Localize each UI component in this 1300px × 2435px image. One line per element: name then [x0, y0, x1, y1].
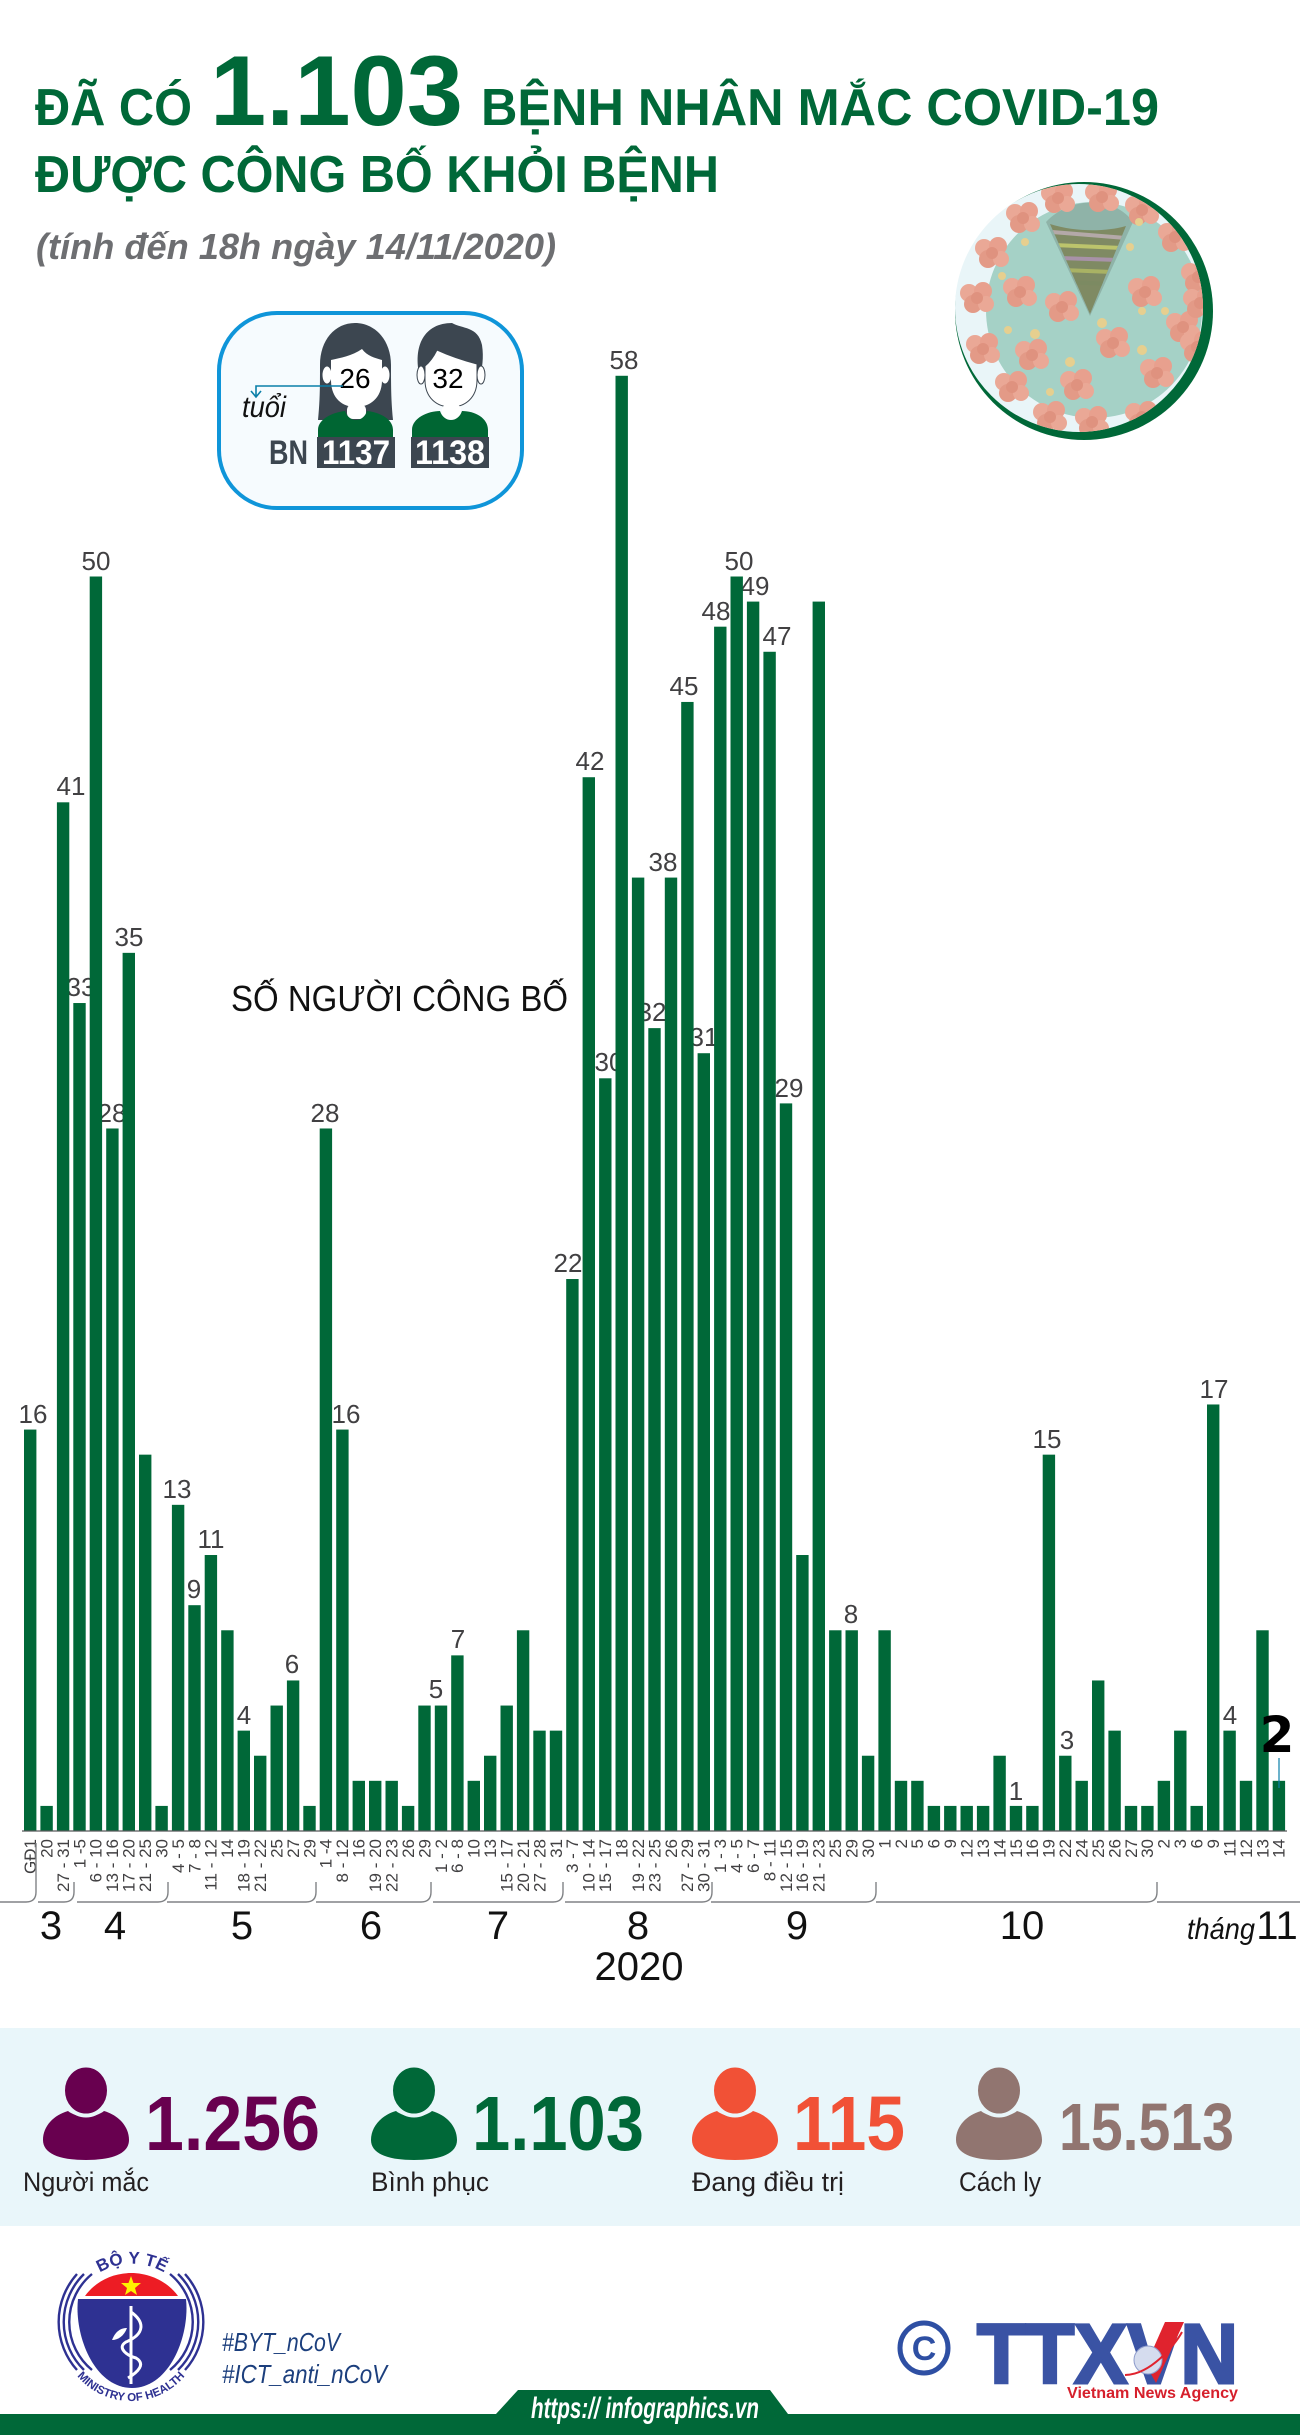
chart: date tick labels: 1 - 3 [711, 1839, 730, 1873]
chart: value labels: 8 [844, 1599, 858, 1629]
chart: date tick labels: 19 - 22 [629, 1839, 648, 1892]
footer: band with URL: https:// infographics.vn [531, 2392, 759, 2425]
chart: date tick labels: 17 - 20 [120, 1839, 139, 1892]
chart: month labels: 5 [231, 1904, 253, 1948]
chart: value labels: 3 [1060, 1725, 1074, 1755]
chart: month labels: 7 [487, 1904, 509, 1948]
chart: date tick labels: 14 [1270, 1839, 1289, 1858]
stat: in treatment: Đang điều trị [692, 2167, 844, 2197]
chart: value labels: 33 [67, 972, 95, 1002]
chart: date tick labels: 12 - 15 [777, 1839, 796, 1892]
title: ĐƯỢC CÔNG BỐ KHỎI BỆNH [35, 145, 719, 204]
chart: value labels: 22 [554, 1248, 582, 1278]
chart: date tick labels: 27 - 28 [530, 1839, 549, 1892]
stat: recovered: 1.103 [472, 2081, 644, 2167]
chart: value labels: 17 [1200, 1374, 1228, 1404]
stat: recovered: Bình phục [371, 2167, 489, 2197]
chart: month brackets [0, 1843, 1300, 1902]
chart: date tick labels: 9 [1204, 1839, 1223, 1848]
chart: date tick labels: 7 - 8 [185, 1839, 204, 1873]
chart: value labels: 29 [775, 1073, 803, 1103]
chart: value labels: 5 [429, 1674, 443, 1704]
chart: date tick labels: 19 [1040, 1839, 1059, 1858]
chart: value labels: 16 [332, 1399, 360, 1429]
chart: date tick labels: 30 - 31 [695, 1839, 714, 1892]
chart: date tick labels: 1 -4 [317, 1839, 336, 1868]
chart: value labels: 32 [638, 997, 666, 1027]
chart: value labels: 4 [237, 1700, 251, 1730]
chart: date tick labels: 15 - 17 [596, 1839, 615, 1892]
chart: date tick labels: 26 [399, 1839, 418, 1858]
chart: value labels: 35 [115, 922, 143, 952]
chart: date tick labels: 10 [465, 1839, 484, 1858]
chart: date tick labels: 26 [662, 1839, 681, 1858]
chart: date tick labels: 29 [415, 1839, 434, 1858]
chart: date tick labels: 20 [37, 1839, 56, 1858]
chart: date tick labels: 4 - 5 [728, 1839, 746, 1873]
chart: month labels: tháng [1187, 1913, 1255, 1946]
title: BỆNH NHÂN MẮC COVID-19 [481, 78, 1159, 137]
chart: date tick labels: 11 [1220, 1839, 1239, 1857]
stat: in treatment: 115 [793, 2081, 905, 2167]
icon: female patient [317, 323, 395, 472]
chart: date tick labels: 30 [859, 1839, 878, 1858]
hashtags: #ICT_anti_nCoV [222, 2359, 389, 2389]
chart: value labels: 42 [576, 746, 604, 776]
stat: quarantined: Cách ly [959, 2167, 1041, 2197]
chart: value labels: 58 [610, 345, 638, 375]
chart: month labels: 4 [104, 1904, 126, 1948]
chart: date tick labels: 9 [941, 1839, 960, 1848]
icon: male patient: 1138 [415, 434, 485, 472]
chart: date tick labels: 16 - 19 [793, 1839, 812, 1892]
chart: date tick labels: 29 [842, 1839, 862, 1858]
chart: date tick labels: 29 [300, 1839, 319, 1858]
chart: value labels: 31 [690, 1022, 718, 1052]
chart: date tick labels: 27 - 29 [678, 1839, 697, 1892]
chart: date tick labels: 25 [826, 1839, 845, 1858]
chart: date tick labels: 2 [892, 1839, 911, 1848]
footer: band with URL [0, 2390, 1300, 2435]
chart: date tick labels: GĐ1 [21, 1839, 40, 1874]
chart: axis [22, 1830, 1287, 1832]
icon: female patient: 26 [339, 363, 371, 394]
icon: male patient: 32 [432, 363, 464, 394]
stat: cases: Người mắc [23, 2166, 149, 2197]
chart: date tick labels: 15 [1007, 1839, 1026, 1858]
chart: date tick labels: 2 [1155, 1839, 1174, 1848]
chart: date tick labels: 18 [612, 1839, 632, 1858]
chart: date tick labels: 5 [908, 1839, 927, 1848]
chart: date tick labels: 27 [1122, 1839, 1141, 1858]
chart: value labels: 9 [187, 1574, 201, 1604]
title [35, 35, 1159, 204]
chart: date tick labels: 20 - 21 [514, 1839, 533, 1892]
chart: date tick labels: 4 - 5 [169, 1839, 188, 1873]
stat: in treatment [692, 2066, 905, 2197]
chart: date tick labels: 13 [1253, 1839, 1272, 1858]
chart: value labels: 45 [670, 671, 698, 701]
chart: date tick labels: 3 [1171, 1839, 1190, 1848]
chart: month labels: 3 [40, 1904, 62, 1948]
chart: date tick labels: 21 - 22 [251, 1839, 270, 1892]
chart: date tick labels: 8 - 11 [760, 1839, 779, 1881]
chart: date tick labels: 14 [218, 1839, 237, 1858]
chart: date tick labels: 22 [1056, 1839, 1075, 1858]
title: ĐÃ CÓ [35, 78, 192, 137]
chart: date tick labels: 6 - 8 [448, 1839, 467, 1873]
chart: date tick labels: 14 [990, 1839, 1009, 1858]
chart: date tick labels: 30 [1138, 1839, 1157, 1858]
chart: month labels: 9 [786, 1904, 808, 1948]
label: tuổi: tuổi [242, 391, 287, 424]
chart: date tick labels: 3 - 7 [563, 1839, 582, 1873]
chart: date tick labels: 11 - 12 [202, 1839, 221, 1891]
chart: date tick labels: 6 - 10 [87, 1839, 106, 1882]
chart: date tick labels: 13 - 16 [103, 1839, 122, 1892]
chart: date tick labels: 6 - 7 [744, 1839, 763, 1873]
chart: value labels: 47 [763, 621, 791, 651]
chart: value labels: 38 [649, 847, 677, 877]
chart: date tick labels: 22 - 23 [382, 1839, 402, 1892]
chart: date tick labels: 24 [1072, 1839, 1092, 1858]
chart: value labels: 7 [451, 1624, 465, 1654]
heading: chart: SỐ NGƯỜI CÔNG BỐ [231, 977, 568, 1019]
chart: date tick labels: 16 [1023, 1839, 1042, 1858]
stat: quarantined: 15.513 [1059, 2090, 1234, 2165]
chart: value labels: 6 [285, 1649, 299, 1679]
chart: value labels: 15 [1033, 1424, 1061, 1454]
icon: virus in circle [955, 181, 1217, 440]
chart: date tick labels: 10 - 14 [580, 1839, 599, 1892]
chart: value labels: 28 [311, 1098, 339, 1128]
chart: date tick labels: 21 - 23 [810, 1839, 829, 1892]
chart: date tick labels: 6 [1188, 1839, 1206, 1848]
chart: date tick labels: 31 [547, 1839, 566, 1858]
stat: cases: 1.256 [145, 2081, 320, 2167]
chart: date tick labels: 6 [925, 1839, 944, 1848]
chart: date tick labels: 30 [152, 1839, 171, 1858]
chart: date tick labels: 25 [268, 1839, 286, 1858]
chart: date tick labels: 27 - 31 [54, 1839, 73, 1892]
chart: date tick labels: 16 [350, 1839, 369, 1858]
chart: value labels: 50 [82, 546, 110, 576]
chart: bars [24, 376, 1285, 1831]
title: 1.103 [210, 35, 463, 146]
chart: date tick labels: 13 [481, 1839, 500, 1858]
chart: date tick labels: 12 [1237, 1839, 1256, 1858]
stat: cases [23, 2066, 320, 2197]
label: BN: BN [269, 434, 308, 472]
chart: date tick labels: 8 - 12 [333, 1839, 352, 1882]
logo: TTXVN: C [912, 2330, 936, 2368]
chart: value labels: 1 [1009, 1776, 1023, 1806]
chart: value labels: 30 [595, 1047, 623, 1077]
callout: latest value: 2 [1260, 1706, 1294, 1764]
chart: date tick labels [21, 1839, 1289, 1892]
logo: TTXVN: TTXVN [977, 2307, 1238, 2401]
chart: date tick labels: 19 - 20 [366, 1839, 385, 1892]
chart: value labels: 48 [702, 596, 730, 626]
logo: Ministry of Health: BỘ Y TẾ [96, 2250, 170, 2272]
panel: totals [0, 2028, 1300, 2226]
logo: Ministry of Health [57, 2250, 205, 2402]
chart: date tick labels: 1 [875, 1839, 894, 1848]
chart: date tick labels: 23 - 25 [645, 1839, 664, 1892]
hashtags [222, 2327, 389, 2389]
chart: month labels: 8 [627, 1904, 649, 1948]
hashtags: #BYT_nCoV [222, 2327, 342, 2357]
chart: date tick labels: 15 - 17 [498, 1839, 516, 1892]
chart: month labels: 2020 [595, 1945, 683, 1989]
chart: date tick labels: 21 - 25 [136, 1839, 155, 1892]
chart: value labels: 4 [1223, 1700, 1237, 1730]
stat: recovered [371, 2066, 644, 2197]
chart: month labels: 11 [1256, 1904, 1298, 1948]
logo: TTXVN: Vietnam News Agency [1067, 2385, 1238, 2402]
chart: date tick labels: 18 - 19 [235, 1839, 254, 1892]
chart: value labels: 16 [19, 1399, 47, 1429]
stat: quarantined [956, 2066, 1234, 2197]
subtitle: date: (tính đến 18h ngày 14/11/2020) [36, 226, 556, 267]
icon: female patient: 1137 [322, 434, 390, 472]
chart: value labels: 13 [163, 1474, 191, 1504]
chart: value labels [19, 345, 1237, 1806]
chart: value labels: 41 [57, 771, 85, 801]
icon: male patient [411, 323, 489, 472]
chart: date tick labels: 1 -5 [70, 1839, 89, 1868]
chart: value labels: 49 [741, 571, 769, 601]
chart: date tick labels: 27 [284, 1839, 303, 1858]
chart: month labels: 6 [360, 1904, 382, 1948]
chart: date tick labels: 1 - 2 [432, 1839, 451, 1873]
chart: value labels: 28 [98, 1098, 126, 1128]
chart: date tick labels: 25 [1089, 1839, 1108, 1858]
chart: month labels [40, 1904, 1298, 1989]
chart: month labels: 10 [1000, 1904, 1044, 1948]
chart: value labels: 50 [725, 546, 753, 576]
chart: value labels: 11 [198, 1524, 224, 1554]
chart: date tick labels: 13 [974, 1839, 993, 1858]
panel: patients [219, 313, 522, 508]
arrow: age pointer [251, 386, 343, 397]
chart: date tick labels: 12 [958, 1839, 976, 1858]
chart: date tick labels: 26 [1105, 1839, 1124, 1858]
logo: Ministry of Health: MINISTRY OF HEALTH [78, 2371, 184, 2402]
